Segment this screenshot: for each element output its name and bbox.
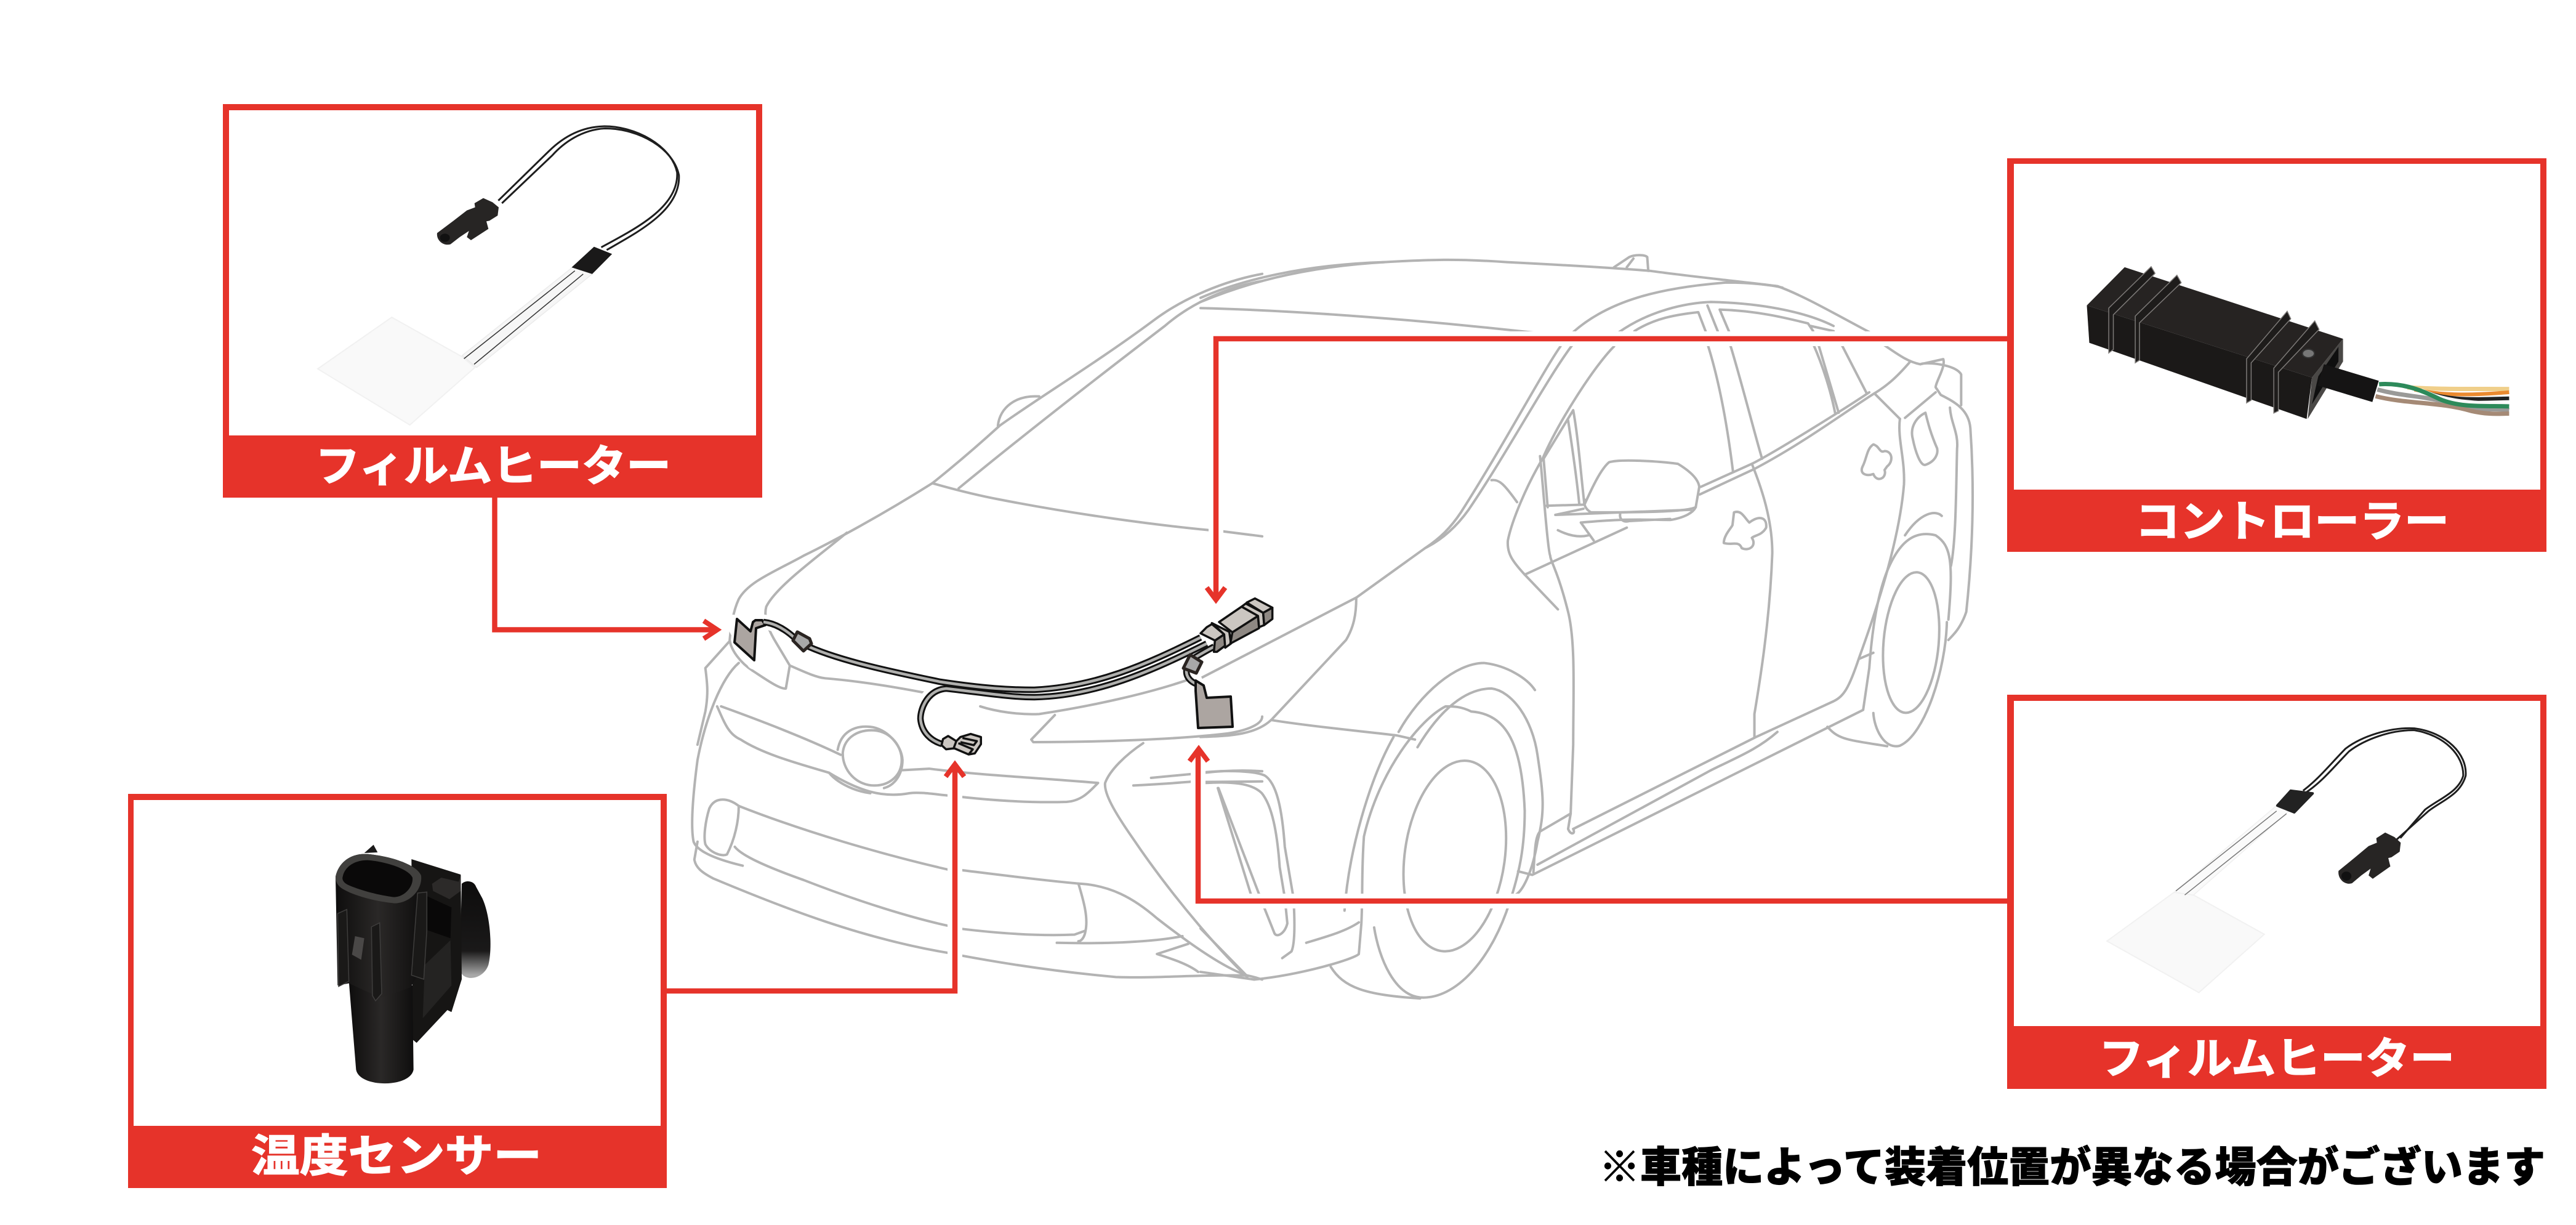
- label: temperature sensor: 温度センサー: [251, 1132, 542, 1181]
- arrow head: down: [1207, 588, 1225, 600]
- arrow head: up: [1189, 749, 1208, 761]
- panel: film heater left: [223, 104, 762, 498]
- tape: left heater: [735, 619, 765, 660]
- connector: [2338, 833, 2401, 884]
- panel: film heater right: [2007, 695, 2546, 1089]
- leader: temperature sensor: [666, 764, 964, 991]
- connector: [437, 198, 499, 245]
- sensor connector: [941, 734, 981, 754]
- leader: film heater right: [1189, 749, 2007, 901]
- photo: controller: [2087, 267, 2509, 419]
- tape: right heater: [1196, 681, 1233, 728]
- leader: film heater left to headlight: [495, 498, 717, 639]
- arrow head: right: [704, 621, 717, 639]
- wires: [763, 622, 1214, 744]
- panel: temperature sensor: [128, 794, 667, 1188]
- car side: roof, doors and wheels: [1201, 255, 1973, 998]
- label: film heater: フィルムヒーター: [315, 442, 671, 490]
- label: controller: コントローラー: [2135, 498, 2449, 546]
- car front: hood and bumper: [692, 274, 1262, 979]
- panel: controller: [2007, 158, 2546, 552]
- door handle: front: [1724, 512, 1766, 549]
- arrow head: up: [946, 764, 964, 777]
- photo: film heater: [2107, 728, 2466, 993]
- ring: right splice: [1183, 655, 1202, 673]
- photo: temperature sensor: [336, 845, 491, 1083]
- leader line halos: [666, 339, 2007, 991]
- leader: controller: [1207, 339, 2007, 600]
- label: film heater: フィルムヒーター: [2099, 1035, 2455, 1083]
- door handle: rear: [1862, 445, 1891, 479]
- photo: film heater: [318, 126, 679, 425]
- ring: left splice: [793, 632, 811, 651]
- footnote: ※車種によって装着位置が異なる場合がございます: [1599, 1144, 2545, 1191]
- controller connector: [1201, 599, 1273, 652]
- car line drawing: [692, 255, 1973, 998]
- wire harness on car: [733, 599, 1273, 754]
- harness halo: [733, 622, 1214, 744]
